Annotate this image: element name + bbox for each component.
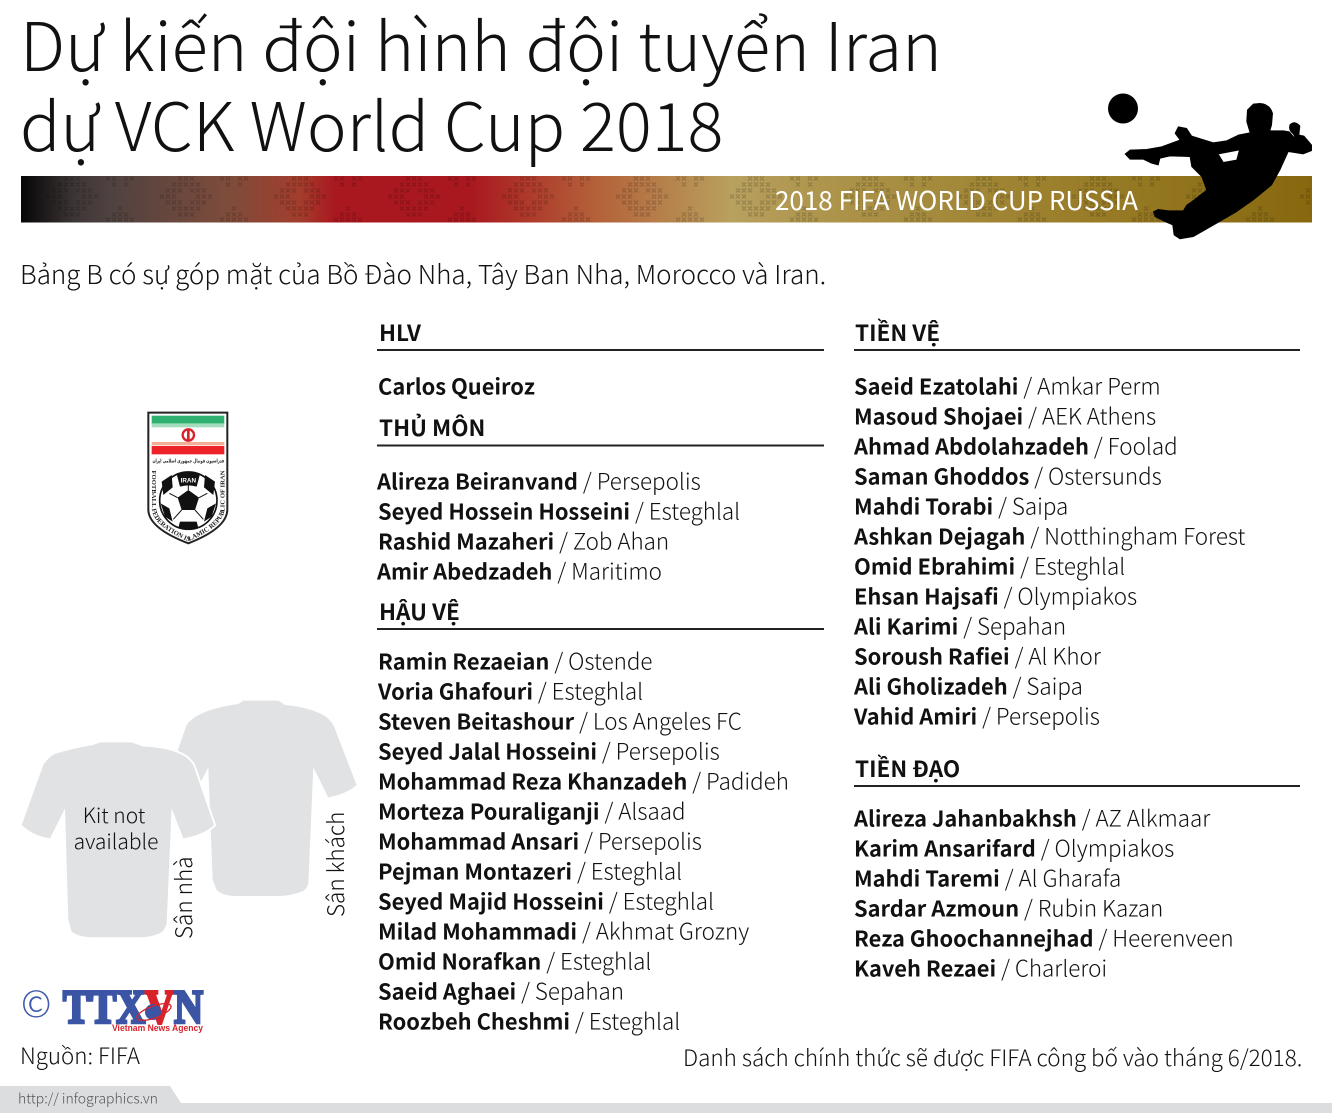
panel: goalkeepers: Rashid Mazaheri / Zob Ahan (378, 524, 669, 556)
panel: midfielders: Saeid Ezatolahi / Amkar Perm (854, 369, 1161, 401)
panel: midfielders (853, 316, 1300, 731)
panel: midfielders: Ashkan Dejagah / Notthingham Forest (853, 519, 1246, 551)
icon: Iran football federation crest: FOOTBALL FEDERATION ISLAMIC REPUBLIC OF IRAN (152, 470, 224, 542)
icon: football (1108, 94, 1138, 124)
kit: home shirt (22, 742, 214, 937)
panel: forwards: Karim Ansarifard / Olympiakos (854, 831, 1174, 863)
panel: goalkeepers: Amir Abedzadeh / Maritimo (376, 554, 662, 586)
panel: forwards: Mahdi Taremi / Al Gharafa (854, 861, 1121, 893)
panel: defenders: Pejman Montazeri / Esteghlal (378, 854, 682, 886)
panel: midfielders: Masoud Shojaei / AEK Athens (854, 399, 1156, 431)
note: Danh sách chính thức sẽ được FIFA công bố vào tháng 6/2018. (683, 1041, 1302, 1073)
icon: Iran football federation crest: IRAN (181, 477, 196, 484)
panel: forwards: Reza Ghoochannejhad / Heerenveen (854, 921, 1234, 953)
panel: midfielders: Ehsan Hajsafi / Olympiakos (854, 579, 1137, 611)
kit label: kit not available: Kit not (83, 800, 146, 830)
logo: TTXVN: © (21, 974, 51, 1028)
title (20, 0, 942, 171)
panel: coach: Carlos Queiroz (378, 370, 535, 401)
subtitle: Bảng B có sự góp mặt của Bồ Đào Nha, Tây Ban Nha, Morocco và Iran. (20, 255, 826, 292)
panel: defenders: Mohammad Ansari / Persepolis (378, 824, 702, 856)
panel: defenders: Morteza Pouraliganji / Alsaad (378, 794, 686, 826)
panel: defenders: Roozbeh Cheshmi / Esteghlal (378, 1004, 680, 1036)
panel: defenders: HẬU VỆ (379, 595, 460, 627)
panel: coach: HLV (379, 316, 422, 348)
kit: away shirt (177, 701, 357, 896)
icon: Iran football federation crest (147, 412, 228, 544)
footer bar (0, 1086, 1332, 1113)
kit label: home: Sân nhà (167, 856, 199, 939)
panel: goalkeepers: Seyed Hossein Hosseini / Esteghlal (378, 494, 740, 526)
panel: defenders: Ramin Rezaeian / Ostende (378, 644, 652, 676)
panel: coach (377, 316, 824, 401)
panel: midfielders: Ahmad Abdolahzadeh / Foolad (853, 429, 1178, 461)
banner: 2018 FIFA World Cup Russia: 2018 FIFA WORLD CUP RUSSIA (775, 181, 1138, 218)
panel: midfielders: Mahdi Torabi / Saipa (854, 489, 1068, 521)
panel: defenders (377, 595, 824, 1036)
icon: Iran football federation crest: فدراسیون فوتبال جمهوری اسلامی ایران (152, 458, 224, 464)
kit label: kit not available (74, 800, 158, 856)
panel: midfielders: Saman Ghoddos / Ostersunds (854, 459, 1162, 491)
panel: midfielders: TIỀN VỆ (855, 316, 940, 348)
title: dự VCK World Cup 2018 (20, 74, 723, 171)
panel: midfielders: Ali Karimi / Sepahan (853, 609, 1066, 641)
panel: forwards: Sardar Azmoun / Rubin Kazan (854, 891, 1163, 923)
panel: forwards: Kaveh Rezaei / Charleroi (854, 951, 1107, 983)
panel: midfielders: Vahid Amiri / Persepolis (853, 699, 1100, 731)
panel: midfielders: Omid Ebrahimi / Esteghlal (854, 549, 1125, 581)
panel: defenders: Voria Ghafouri / Esteghlal (377, 674, 643, 706)
panel: forwards (853, 752, 1300, 983)
panel: defenders: Omid Norafkan / Esteghlal (378, 944, 651, 976)
source: Nguồn: FIFA (20, 1039, 140, 1071)
panel: forwards: TIỀN ĐẠO (855, 752, 960, 784)
panel: forwards: Alireza Jahanbakhsh / AZ Alkmaar (853, 801, 1211, 833)
logo: TTXVN: Vietnam News Agency (112, 1023, 204, 1034)
logo: TTXVN: TTXVN (63, 981, 203, 1034)
panel: defenders: Seyed Majid Hosseini / Esteghlal (378, 884, 714, 916)
logo: TTXVN (21, 974, 204, 1034)
icon: footballer silhouette (1125, 103, 1312, 239)
footer bar: http:// infographics.vn (18, 1088, 158, 1108)
panel: defenders: Milad Mohammadi / Akhmat Grozny (378, 914, 749, 946)
banner: 2018 FIFA World Cup Russia (21, 176, 1312, 222)
panel: goalkeepers (376, 411, 824, 586)
panel: midfielders: Ali Gholizadeh / Saipa (853, 669, 1083, 701)
panel: goalkeepers: THỦ MÔN (379, 411, 485, 443)
panel: defenders: Steven Beitashour / Los Angeles FC (378, 704, 742, 736)
panel: defenders: Mohammad Reza Khanzadeh / Padideh (378, 764, 789, 796)
panel: defenders: Seyed Jalal Hosseini / Persepolis (378, 734, 720, 766)
kit label: kit not available: available (74, 826, 158, 856)
panel: defenders: Saeid Aghaei / Sepahan (378, 974, 624, 1006)
panel: goalkeepers: Alireza Beiranvand / Persepolis (376, 464, 701, 496)
kit label: away: Sân khách (319, 812, 351, 917)
panel: midfielders: Soroush Rafiei / Al Khor (854, 639, 1102, 671)
